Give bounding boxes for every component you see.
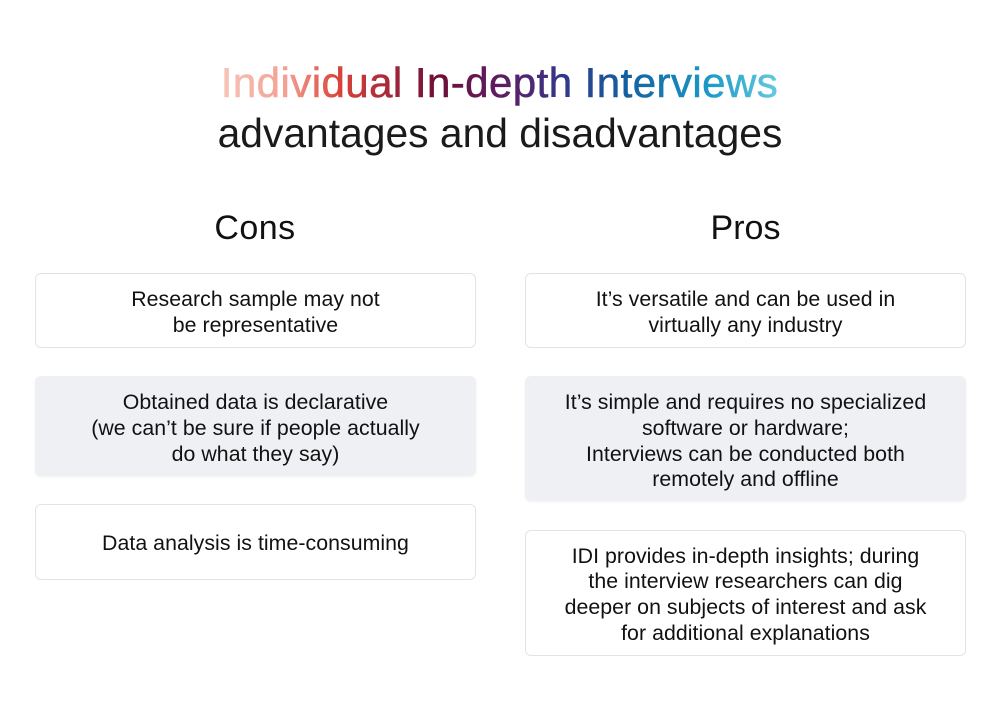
panel: cons 1: Research sample may not <box>131 287 380 311</box>
panel: pros 1: virtually any industry <box>648 312 842 336</box>
panel: cons 1: be representative <box>173 312 338 336</box>
panel: pros 3: the interview researchers can dig <box>588 569 903 593</box>
panel: cons 3 <box>35 504 476 580</box>
panel: pros 1 <box>525 273 966 348</box>
panel: cons 2 <box>35 376 476 476</box>
panel: cons 3: Data analysis is time-consuming <box>102 531 409 555</box>
panel: pros 3 <box>525 530 966 656</box>
panel: cons 2: (we can’t be sure if people actually <box>91 416 420 440</box>
panel: pros 3: IDI provides in-depth insights; during <box>572 544 919 568</box>
panel: pros 3: for additional explanations <box>621 621 870 645</box>
panel: pros 2: software or hardware; <box>642 416 849 440</box>
panel: pros 1: It’s versatile and can be used in <box>596 287 895 311</box>
panel: pros 2 <box>525 376 966 501</box>
panel: pros 2: remotely and offline <box>652 467 839 491</box>
panel: pros 2: It’s simple and requires no specialized <box>565 390 926 414</box>
title line 1: gradient: Individual In-depth Interviews <box>221 59 778 106</box>
panel: pros 2: Interviews can be conducted both <box>586 442 905 466</box>
title line 2: advantages and disadvantages <box>218 110 782 156</box>
panel: pros 3: deeper on subjects of interest and ask <box>565 595 926 619</box>
panel: cons 1 <box>35 273 476 348</box>
heading: pros: Pros <box>711 209 780 247</box>
panel: cons 2: Obtained data is declarative <box>123 390 388 414</box>
panel: cons 2: do what they say) <box>172 442 339 466</box>
heading: cons: Cons <box>214 209 296 247</box>
